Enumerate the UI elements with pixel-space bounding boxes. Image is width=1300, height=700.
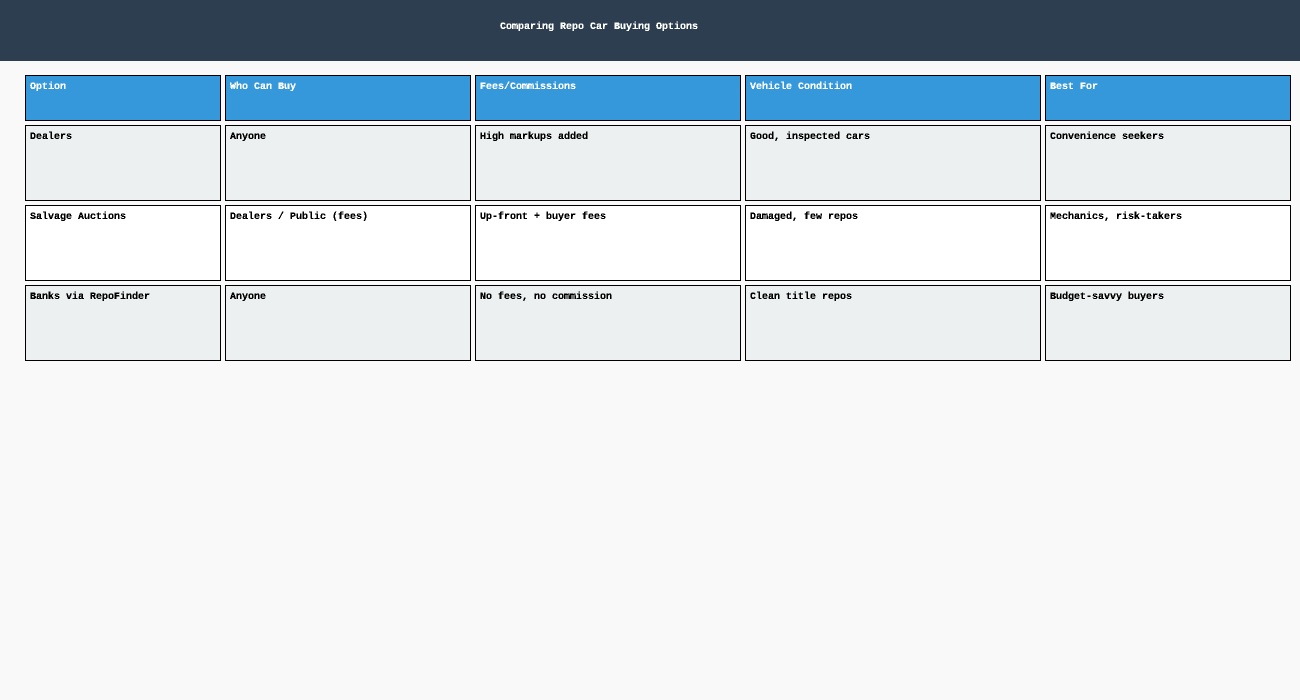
- row 1 cell: option: Dealers: [30, 132, 72, 143]
- row 2 cell: fees: [475, 205, 741, 281]
- row 1 cell: who can buy: [225, 125, 471, 201]
- row 3 cell: option: [25, 285, 221, 361]
- row 1 cell: best for: Convenience seekers: [1050, 132, 1164, 143]
- row 2 cell: who can buy: Dealers / Public (fees): [230, 212, 368, 223]
- row 3 cell: fees: No fees, no commission: [480, 292, 612, 303]
- row 3 cell: condition: [745, 285, 1041, 361]
- row 2 cell: option: [25, 205, 221, 281]
- row 3 cell: condition: Clean title repos: [750, 292, 852, 303]
- column heading: Vehicle Condition: Vehicle Condition: [750, 82, 852, 93]
- row 3 cell: best for: Budget-savvy buyers: [1050, 292, 1164, 303]
- column heading: Option: Option: [30, 82, 66, 93]
- row 1 cell: fees: High markups added: [480, 132, 588, 143]
- row 3 cell: who can buy: Anyone: [230, 292, 266, 303]
- row 1 cell: condition: Good, inspected cars: [750, 132, 870, 143]
- row 1 cell: fees: [475, 125, 741, 201]
- comparison table: [25, 75, 1291, 361]
- row 3 cell: fees: [475, 285, 741, 361]
- header band: [0, 0, 1300, 61]
- row 3 cell: option: Banks via RepoFinder: [30, 292, 150, 303]
- row 2 cell: best for: [1045, 205, 1291, 281]
- row 2 cell: fees: Up-front + buyer fees: [480, 212, 606, 223]
- row 2 cell: condition: Damaged, few repos: [750, 212, 858, 223]
- title: Comparing Repo Car Buying Options: [500, 22, 698, 33]
- row 2 cell: option: Salvage Auctions: [30, 212, 126, 223]
- row 1 cell: condition: [745, 125, 1041, 201]
- row 1 cell: option: [25, 125, 221, 201]
- row 2 cell: who can buy: [225, 205, 471, 281]
- column heading: Best For: [1045, 75, 1291, 121]
- row 2 cell: condition: [745, 205, 1041, 281]
- row 1 cell: best for: [1045, 125, 1291, 201]
- row 3 cell: who can buy: [225, 285, 471, 361]
- column heading: Who Can Buy: Who Can Buy: [230, 82, 296, 93]
- row 2 cell: best for: Mechanics, risk-takers: [1050, 212, 1182, 223]
- column heading: Fees/Commissions: [475, 75, 741, 121]
- row 1 cell: who can buy: Anyone: [230, 132, 266, 143]
- column heading: Best For: Best For: [1050, 82, 1098, 93]
- column heading: Fees/Commissions: Fees/Commissions: [480, 82, 576, 93]
- column heading: Who Can Buy: [225, 75, 471, 121]
- column heading: Vehicle Condition: [745, 75, 1041, 121]
- row 3 cell: best for: [1045, 285, 1291, 361]
- column heading: Option: [25, 75, 221, 121]
